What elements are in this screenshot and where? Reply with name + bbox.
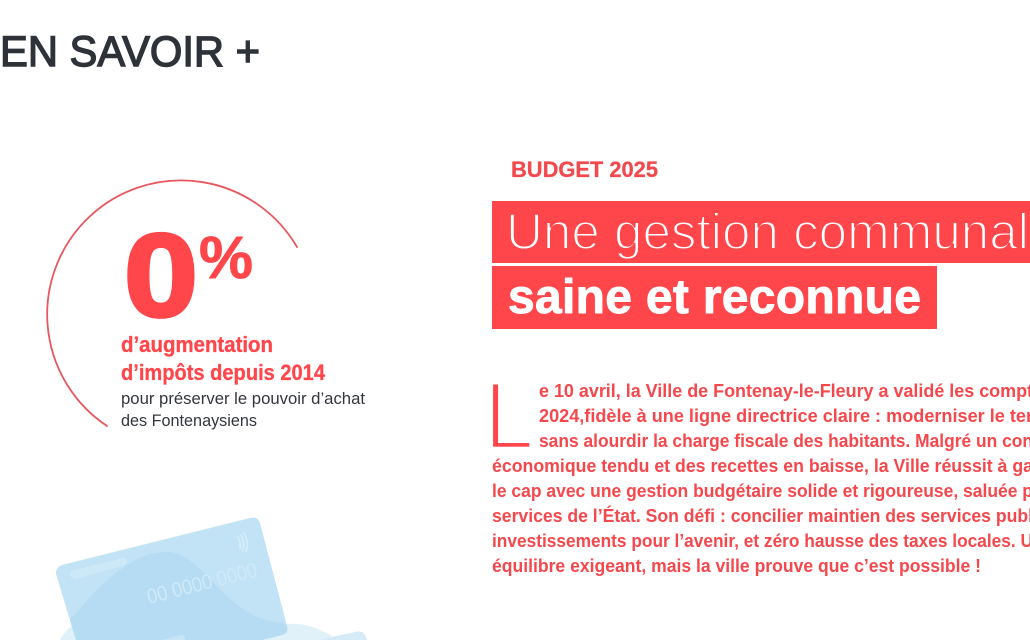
body paragraph: équilibre exigeant, mais la ville prouve que c’est possible !	[492, 556, 981, 576]
card darker wave	[70, 552, 287, 640]
body paragraph: services de l’État. Son défi : concilier maintien des services publ	[492, 505, 1030, 526]
pale shape right of card	[318, 631, 367, 640]
label: budget 2025: BUDGET 2025	[511, 157, 658, 182]
dark caption: pour préserver le pouvoir d’achat	[121, 389, 365, 408]
heading: en savoir plus: EN SAVOIR +	[0, 28, 260, 76]
card body	[56, 518, 287, 640]
body paragraph	[492, 381, 1030, 576]
banner line 1: Une gestion communal	[506, 203, 1029, 260]
dark caption	[121, 389, 365, 430]
title banner	[492, 201, 1030, 329]
card number: 00 0000 0000	[145, 559, 260, 609]
red caption: d’augmentation	[121, 332, 273, 357]
decorative arc around figure	[47, 180, 297, 426]
red caption	[121, 332, 326, 385]
big number 0: 0	[124, 210, 198, 342]
body paragraph: 2024,fidèle à une ligne directrice claire : moderniser le ter	[539, 406, 1030, 426]
pale tab at card bottom	[163, 635, 185, 640]
panel: key figure 0%	[47, 180, 365, 430]
percent sign: %	[199, 225, 253, 291]
banner line 2: saine et reconnue	[508, 271, 921, 324]
contactless icon	[238, 533, 247, 552]
body paragraph: économique tendu et des recettes en baisse, la Ville réussit à ga	[492, 456, 1030, 476]
body paragraph: e 10 avril, la Ville de Fontenay-le-Fleury a validé les compt	[539, 381, 1030, 401]
drop cap L: L	[484, 362, 534, 470]
dark caption: des Fontenaysiens	[121, 411, 257, 430]
illustration: bank card	[56, 518, 367, 640]
card stripe	[70, 558, 127, 579]
red caption: d’impôts depuis 2014	[121, 360, 326, 385]
pale cloud behind card	[60, 624, 336, 640]
